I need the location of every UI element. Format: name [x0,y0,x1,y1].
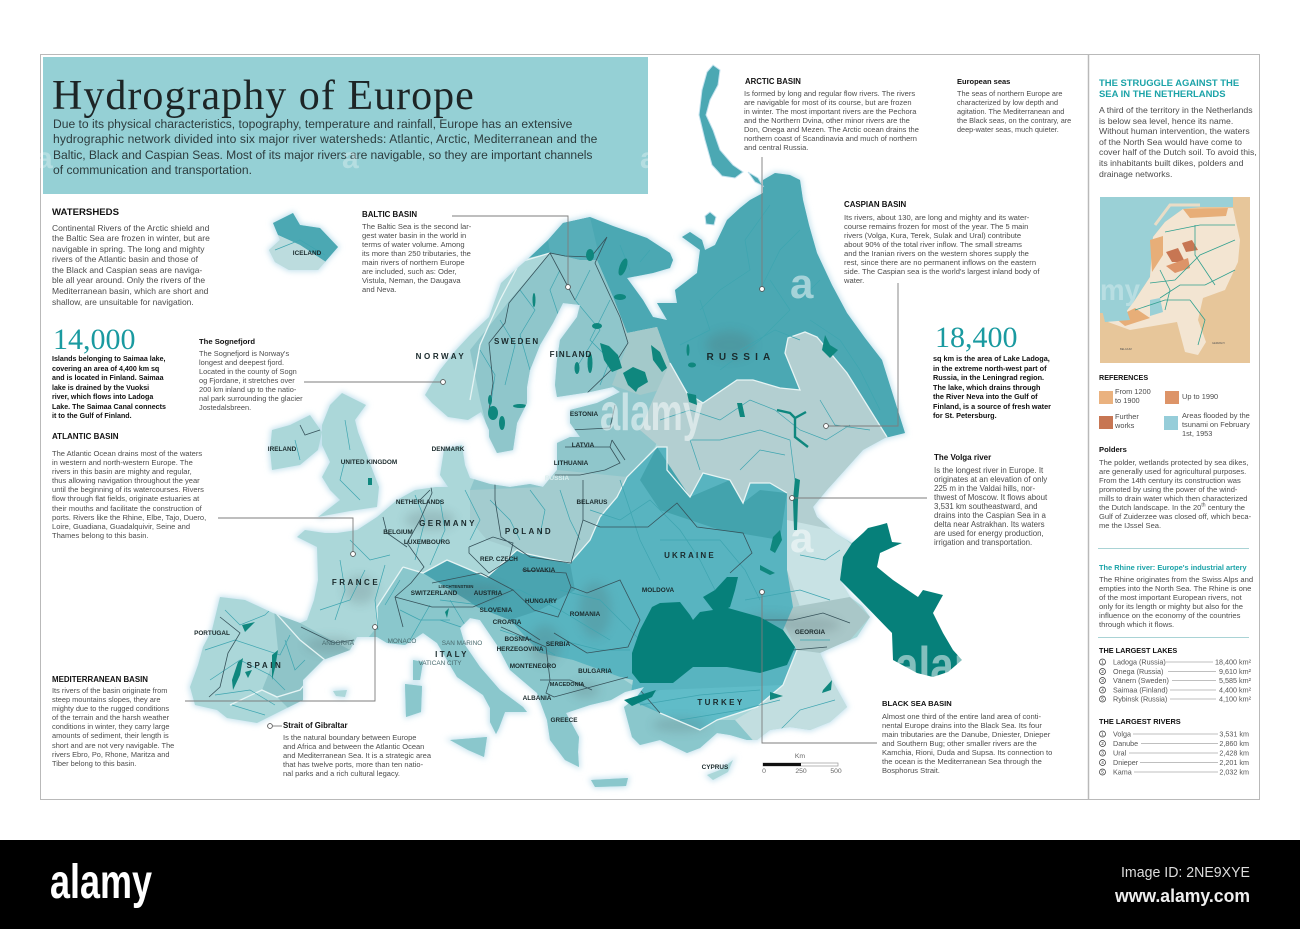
text: Atlantic basin: rivers in this basin are mighty and regular, [52,467,192,476]
text: Volga river: drains into the Caspian Sea in a [934,511,1046,520]
country labels: REP. CZECH [480,556,518,563]
text: struggle against the sea: A third of the territory in the Netherlands [1099,105,1253,115]
table: largest lakes: Saimaa (Finland) [1113,686,1168,694]
bottom black bar with credits: www.alamy.com [1114,886,1250,906]
table: largest lakes: 9,610 km² [1219,667,1252,676]
text: European seas: the Black seas, on the contrary, are [957,116,1071,125]
text: Atlantic basin: ports. Rivers like the Rhine, Elbe, Tajo, Duero, [52,513,206,522]
text: Lake Ladoga: The lake, which drains through [933,383,1040,392]
Caspian Sea [840,523,962,677]
table: largest lakes: Ladoga (Russia) [1113,658,1166,666]
watermark: a [790,514,814,561]
table: largest lakes: 3 [1101,678,1104,683]
table: largest rivers: 5 [1101,770,1104,775]
intro paragraph: Baltic, Black and Caspian Seas. Most of its major rivers are navigable, so they are important channels [53,148,592,162]
country labels: ANDORRA [322,640,355,647]
table: largest lakes [1100,658,1252,704]
text: polders: promoted by using the power of the wind- [1099,485,1237,494]
watermark: a [36,142,53,175]
text: Baltic basin: The Baltic Sea is the second lar- [362,222,471,230]
table: largest rivers: Volga [1113,730,1131,738]
text: struggle against the sea: cover half of the Dutch soil. To avoid this, [1099,147,1257,157]
outer frame [40,54,1260,800]
heading: Mediterranean basin: MEDITERRANEAN BASIN [52,675,148,684]
text: Rhine river: The Rhine originates from the Swiss Alps and [1099,574,1253,584]
text: Arctic basin: northern coast of Scandinavia and much of northern [744,134,917,143]
scale bar [762,753,842,775]
table: largest lakes: 18,400 km² [1215,658,1252,666]
text: Strait of Gibraltar [283,732,432,778]
text: Volga river: thwest of Moscow. It flows about [934,493,1047,502]
text: Strait of Gibraltar: and Mediterranean Sea. It is a strategic area [283,751,431,760]
text: Mediterranean basin: rivers Ebro, Po, Rhone, Maritza and [52,750,169,759]
country labels: ICELAND [293,250,322,257]
country labels: SWITZERLAND [411,590,458,597]
country labels: VATICAN CITY [418,660,462,667]
watermark: alamy [895,637,1015,695]
Black Sea basin [423,447,797,730]
country labels [194,250,825,771]
Mediterranean basin [350,567,757,790]
country labels: BELARUS [577,499,608,506]
text: Lake Ladoga: Russia, in the Leningrad region. [933,373,1044,382]
watermark: a [640,142,657,175]
watermark: a [342,142,359,175]
heading: Caspian basin: CASPIAN BASIN [844,200,906,209]
country labels: HUNGARY [525,598,558,605]
text: polders: are generally used for agricultural purposes. [1099,467,1246,476]
text: Black Sea basin [882,712,1052,775]
table: largest lakes: 1 [1101,660,1104,665]
heading: Arctic basin: ARCTIC BASIN [745,77,801,86]
text: Saimaa lake: Lake. The Saimaa Canal connects [52,403,166,411]
text: Rhine river: of the most important European rivers, not [1099,593,1242,602]
Netherlands map [1100,197,1250,363]
text: European seas: characterized by low depth and [957,98,1058,107]
country labels: ROMANIA [570,611,601,618]
table: largest lakes: 5 [1101,697,1104,702]
leader lines and dots [185,157,927,743]
text: Strait of Gibraltar: Is the natural boundary between Europe [283,732,416,742]
text: Volga river: originates at an elevation of only [934,475,1047,484]
text: Saimaa lake: covering an area of 4,400 km sq [52,365,159,373]
heading: struggle against the sea [1099,78,1239,100]
Black Sea, Azov and Marmara [624,577,795,706]
heading: largest lakes: THE LARGEST LAKES [1099,646,1177,655]
country labels: SPAIN [247,661,283,670]
country labels: DENMARK [432,446,465,453]
text: Mediterranean basin: mighty due to the rugged conditions [52,704,169,713]
heading: Sognefjord: The Sognefjord [199,337,255,346]
text: Baltic basin [362,222,471,294]
table: largest rivers: Dnieper [1113,758,1139,767]
text: Caspian basin [844,212,1040,285]
text: watersheds: navigable in spring. The long and mighty [52,244,204,254]
country labels: BELGIUM [383,529,413,536]
text: Baltic basin: its more than 250 tributaries, the [362,249,471,258]
heading: polders: Polders [1099,445,1127,454]
Caspian basin [640,364,884,529]
text: Caspian basin: Its rivers, about 130, are long and mighty and its water- [844,212,1029,222]
label: up to 1990: Up to 1990 [1182,392,1218,401]
text: Sognefjord [199,348,303,412]
text: Saimaa lake: river, which flows into Ladoga [52,393,153,401]
table: largest rivers: 2,032 km [1219,768,1249,776]
watermark: my [1100,274,1140,307]
table: largest rivers: 2,201 km [1219,758,1249,767]
text: Strait of Gibraltar: and Africa and between the Atlantic Ocean [283,742,424,751]
text: polders: me the IJssel Sea. [1099,521,1161,530]
references legend swatches [1099,391,1179,430]
text: Arctic basin: Is formed by long and regular flow rivers. The rivers [744,88,915,98]
text: Baltic basin: terms of water volume. Among [362,240,465,249]
country labels: SAN MARINO [442,640,482,647]
text: Volga river [934,466,1048,547]
label: flooded areas [1182,411,1250,438]
text: Baltic basin: main rivers of northern Europe [362,258,465,267]
text: watersheds: rivers of the Atlantic basin and those of [52,254,198,264]
country labels: MOLDOVA [642,587,674,594]
text: struggle against the sea: is below sea level, hence its name. [1099,116,1233,126]
text: Rhine river: influence on the economy of the countries [1099,611,1240,620]
text: Atlantic basin: Loire, Guadiana, Guadalquivir, Seine and [52,522,190,531]
text: struggle against the sea: drainage networks. [1099,169,1172,179]
text: Caspian basin: water. [844,276,864,285]
text: Volga river: 3,531 km southeastward, and [934,502,1038,511]
text: Mediterranean basin: of the terrain and the harsh weather [52,713,169,722]
text: polders [1099,458,1251,530]
watermark: alamy [600,384,703,442]
text: Strait of Gibraltar: nal parks and a rich cultural legacy. [283,769,400,778]
text: polders: mills to drain water which then characterized [1099,494,1248,503]
table: largest rivers: Kama [1113,768,1132,776]
country labels: ALBANIA [523,695,552,702]
text: struggle against the sea: of the North Sea would have come to [1099,137,1242,147]
table: largest lakes: Vänern (Sweden) [1113,676,1169,685]
heading: Rhine river: The Rhine river: Europe's industrial artery [1099,563,1247,572]
text: watersheds: ble all year around. Only the rivers of the [52,275,205,285]
scale bar: 500 [830,768,842,775]
text: polders: From the 14th century its construction was [1099,476,1241,485]
country labels: ITALY [435,650,469,659]
heading: Black Sea basin: BLACK SEA BASIN [882,699,952,708]
text: Sognefjord: og Fjordane, it stretches over [199,376,295,385]
label: flooded areas: Areas flooded by the [1182,411,1250,420]
text: polders: The polder, wetlands protected by sea dikes, [1099,458,1248,466]
table: largest rivers: 4 [1101,760,1104,765]
table: largest rivers: 2 [1101,741,1104,746]
country labels: BULGARIA [578,668,612,675]
country labels: MACEDONIA [550,682,584,688]
text: European seas: agitation. The Mediterranean and [957,107,1064,116]
text: European seas: deep-water seas, much quieter. [957,125,1059,134]
text: Saimaa lake [52,355,166,420]
text: Baltic basin: are included, such as: Oder, [362,267,457,276]
country labels: SLOVAKIA [523,567,556,574]
text: European seas [957,88,1071,134]
text: watersheds [52,222,210,307]
Netherlands map: BELGIUM [1120,347,1132,351]
text: Sognefjord: longest and deepest fjord. [199,358,284,367]
text: European seas: The seas of northern Europe are [957,88,1062,98]
stat: 14,000: 14,000 [53,323,136,356]
text: Mediterranean basin: Tiber belong to this basin. [52,759,136,768]
text: Volga river: 225 m in the Valdai hills, nor- [934,484,1035,493]
country labels: UKRAINE [664,551,716,560]
text: Atlantic basin: thus allowing navigation throughout the year [52,476,200,485]
text: polders: Gulf of Zuiderzee was closed off, which beca- [1099,512,1251,521]
text: Caspian basin: and the Iranian rivers on the western shores supply the [844,249,1029,258]
Iceland dark part [273,213,338,262]
country labels: GEORGIA [795,629,825,636]
table: largest rivers: 2,860 km [1219,739,1249,748]
table: largest rivers: 2,428 km [1219,748,1249,758]
table: largest rivers: 3 [1101,751,1104,756]
text: struggle against the sea [1099,105,1257,179]
text: Mediterranean basin: conditions in winter, they carry large [52,722,170,731]
text: Rhine river: only for its length or mighty but also for the [1099,602,1243,611]
text: watersheds: the Baltic Sea are frozen in winter, but are [52,233,210,243]
text: Rhine river [1099,574,1253,629]
table: largest rivers: Danube [1113,739,1138,748]
table: largest lakes: Rybinsk (Russia) [1113,694,1167,704]
text: struggle against the sea: its inhabitants built dikes, polders and [1099,158,1243,168]
bottom black bar with credits: alamy [50,856,152,909]
country labels: CROATIA [493,619,522,626]
text: watersheds: the Black and Caspian seas are naviga- [52,265,202,275]
text: Caspian basin: about 90% of the total river inflow. The small streams [844,240,1022,249]
text: Arctic basin [744,88,919,152]
text: Mediterranean basin [52,686,174,768]
country labels: HERZEGOVINA [497,646,544,653]
text: Volga river: are used for energy production, [934,529,1044,538]
intro paragraph [53,117,598,177]
text: Volga river: Is the longest river in Europe. It [934,466,1043,474]
heading: struggle against the sea: SEA IN THE NETHERLANDS [1099,89,1226,100]
text: Sognefjord: Located in the county of Sogn [199,367,297,376]
text: Sognefjord: The Sognefjord is Norway's [199,348,289,358]
table: largest lakes: 5,585 km² [1219,676,1252,685]
table: largest rivers: Ural [1113,748,1127,758]
country labels: AUSTRIA [474,590,503,597]
Netherlands map: GERMANY [1212,341,1225,345]
table: largest rivers [1100,730,1249,776]
intro paragraph: hydrographic network divided into six major river watersheds: Atlantic, Arctic, Mediterranean and the [53,132,598,146]
text: Saimaa lake: Islands belonging to Saimaa lake, [52,355,166,363]
text: Volga river: irrigation and transportation. [934,538,1032,547]
text: Saimaa lake: it to the Gulf of Finland. [52,412,132,420]
heading: references: REFERENCES [1099,373,1148,382]
heading: Baltic basin: BALTIC BASIN [362,210,417,219]
label: from 1200 to 1900 [1115,387,1151,405]
title: Hydrography of Europe [52,73,475,119]
table: largest lakes: Onega (Russia) [1113,667,1163,676]
text: Lake Ladoga: for St. Petersburg. [933,411,997,420]
rivers [205,205,880,740]
text: watersheds: shallow, are unsuitable for navigation. [52,297,194,307]
country labels: MONACO [388,638,416,645]
heading: struggle against the sea: THE STRUGGLE AGAINST THE [1099,78,1239,88]
relief [305,331,840,732]
table: largest lakes: 4,400 km² [1219,686,1252,694]
country labels: RUSSIA [545,475,569,482]
text: Atlantic basin: The Atlantic Ocean drains most of the waters [52,449,202,458]
text: Arctic basin: are navigable for most of its course, but are frozen [744,98,912,107]
country labels: LATVIA [572,442,595,449]
text: Black Sea basin: the ocean is the Mediterranean Sea through the [882,757,1042,766]
text: Mediterranean basin: amounts of sediment, their length is [52,731,169,740]
country labels: FRANCE [332,578,380,587]
text: Atlantic basin [52,449,206,540]
country labels: RUSSIA [707,352,775,363]
text: Mediterranean basin: Its rivers of the basin originate from [52,686,167,695]
label: further works [1115,412,1139,430]
label: further works: works [1115,421,1134,430]
text: Sognefjord: Jostedalsbreen. [199,403,251,412]
text: Caspian basin: side. The Caspian sea is the world's largest inland body of [844,267,1039,276]
text: Baltic basin: Vistula, Neman, the Daugava [362,276,461,285]
Arctic basin [529,173,905,438]
text: Saimaa lake: lake is drained by the Vuoksi [52,384,149,392]
text: Black Sea basin: Almost one third of the entire land area of conti- [882,712,1041,720]
table: largest lakes: 4 [1101,688,1104,693]
heading: Volga river: The Volga river [934,453,991,462]
scale bar: 250 [795,768,807,775]
text: Lake Ladoga [933,354,1051,420]
country labels: SERBIA [546,641,570,648]
text: Black Sea basin: nental Europe drains into the Black Sea. Its four [882,721,1042,730]
heading: largest rivers: THE LARGEST RIVERS [1099,717,1181,726]
label: flooded areas: 1st, 1953 [1182,429,1212,438]
text: Arctic basin: in winter. The most important rivers are the Pechora [744,107,916,116]
country labels: IRELAND [268,446,297,453]
text: Black Sea basin: Kamchia, Rioni, Duda and Supsa. Its connection to [882,748,1052,757]
text: Atlantic basin: their mouths and facilitate the construction of [52,504,202,513]
text: Lake Ladoga: in the extreme north-west part of [933,364,1047,373]
label: from 1200 to 1900: to 1900 [1115,396,1140,405]
text: Atlantic basin: until the beginning of its watercourses. Rivers [52,485,204,494]
scale bar: 0 [762,768,766,775]
text: Caspian basin: course remains frozen for most of the year. The 5 main [844,222,1028,231]
text: Atlantic basin: in western and north-western Europe. The [52,458,193,467]
table: largest lakes: 4,100 km² [1219,694,1252,704]
country labels: NORWAY [416,352,466,361]
text: Strait of Gibraltar: that has twelve ports, more than ten natio- [283,760,423,769]
scale bar: Km [795,753,805,760]
country labels: ESTONIA [570,411,599,418]
country labels: LUXEMBOURG [404,539,450,546]
text: Saimaa lake: and is located in Finland. Saimaa [52,374,164,382]
country labels: GERMANY [419,519,477,528]
text: Lake Ladoga: sq km is the area of Lake Ladoga, [933,354,1050,363]
text: Volga river: delta near Astrakhan. Its waters [934,520,1045,529]
text: watersheds: Mediterranean basin, which are short and [52,286,208,296]
text: Lake Ladoga: the River Neva into the Gulf of [933,392,1038,401]
country labels: PORTUGAL [194,630,230,637]
country labels: TURKEY [697,698,745,707]
bottom black bar with credits [0,840,1300,929]
text: Mediterranean basin: short and are not very navigable. The [52,741,174,750]
label: flooded areas: tsunami on February [1182,420,1250,429]
country labels: MONTENEGRO [510,663,556,670]
text: Arctic basin: and the Northern Dvina, other minor rivers are the [744,116,910,125]
lakes [232,249,838,700]
white basin divides [230,253,887,730]
table: largest rivers: 3,531 km [1219,730,1249,738]
text: Atlantic basin: flow through flat fields, originate estuaries at [52,494,199,503]
heading: watersheds: WATERSHEDS [52,207,119,218]
text: Caspian basin: rest, since there are no permanent inflows on the eastern [844,258,1036,267]
bottom black bar with credits: Image ID: 2NE9XYE [1121,864,1250,881]
right column dividers [1098,548,1249,638]
Baltic basin north [470,254,657,490]
text: Black Sea basin: and Southern Bug; other smaller rivers are the [882,739,1037,748]
text: Arctic basin: Don, Onega and Mezen. The Arctic ocean drains the [744,125,919,134]
text: Mediterranean basin: steep mountains slopes, they are [52,695,160,704]
stat: 18,400: 18,400 [935,321,1018,354]
text: Black Sea basin: main tributaries are the Danube, Dniester, Dnieper [882,730,1050,739]
country labels: FINLAND [550,350,592,359]
country labels: GREECE [550,717,578,724]
country borders [209,237,850,713]
text: Baltic basin: gest water basin in the world in [362,231,466,240]
Novaya Zemlya [699,65,763,225]
text: Sognefjord: 200 km inland up to the natio- [199,385,296,394]
country labels: UNITED KINGDOM [341,459,397,466]
label: from 1200 to 1900: From 1200 [1115,387,1151,396]
watermark: a [790,260,814,307]
text: Rhine river: empties into the North Sea. The Rhine is one [1099,584,1251,593]
country labels: BOSNIA- [505,636,531,643]
text: Baltic basin: and Neva. [362,285,397,294]
text: Arctic basin: and central Russia. [744,143,808,152]
title panel background [43,57,648,194]
text: struggle against the sea: Without human intervention, the waters [1099,126,1250,136]
intro paragraph: Due to its physical characteristics, topography, temperature and rainfall, Europe has an extensive [53,117,572,131]
country labels: LITHUANIA [554,460,589,467]
country labels: LIECHTENSTEIN [439,584,473,589]
text: watersheds: Continental Rivers of the Arctic shield and [52,222,209,232]
text: Lake Ladoga: Finland, is a source of fresh water [933,402,1051,411]
text: Black Sea basin: Bosphorus Strait. [882,766,940,775]
country labels: POLAND [505,527,553,536]
heading: Atlantic basin: ATLANTIC BASIN [52,432,119,441]
text: polders: the Dutch landscape. In the 20th century the [1099,502,1245,512]
country labels: CYPRUS [702,764,729,771]
country labels: SLOVENIA [480,607,513,614]
text: Rhine river: through which it flows. [1099,620,1174,629]
country labels: NETHERLANDS [396,499,445,506]
table: largest rivers: 1 [1101,732,1104,737]
heading: Strait of Gibraltar: Strait of Gibraltar [283,721,348,730]
text: Sognefjord: nal park surrounding the glacier [199,394,303,403]
intro paragraph: of communication and transportation. [53,163,252,177]
heading: European seas: European seas [957,77,1010,86]
label: further works: Further [1115,412,1139,421]
country labels: SWEDEN [494,337,540,346]
map of Europe [180,65,962,800]
text: Atlantic basin: Thames belong to this basin. [52,531,148,540]
table: largest lakes: 2 [1101,669,1104,674]
text: Caspian basin: rivers (Volga, Kura, Terek, Sulak and Ural) contribute [844,231,1021,240]
